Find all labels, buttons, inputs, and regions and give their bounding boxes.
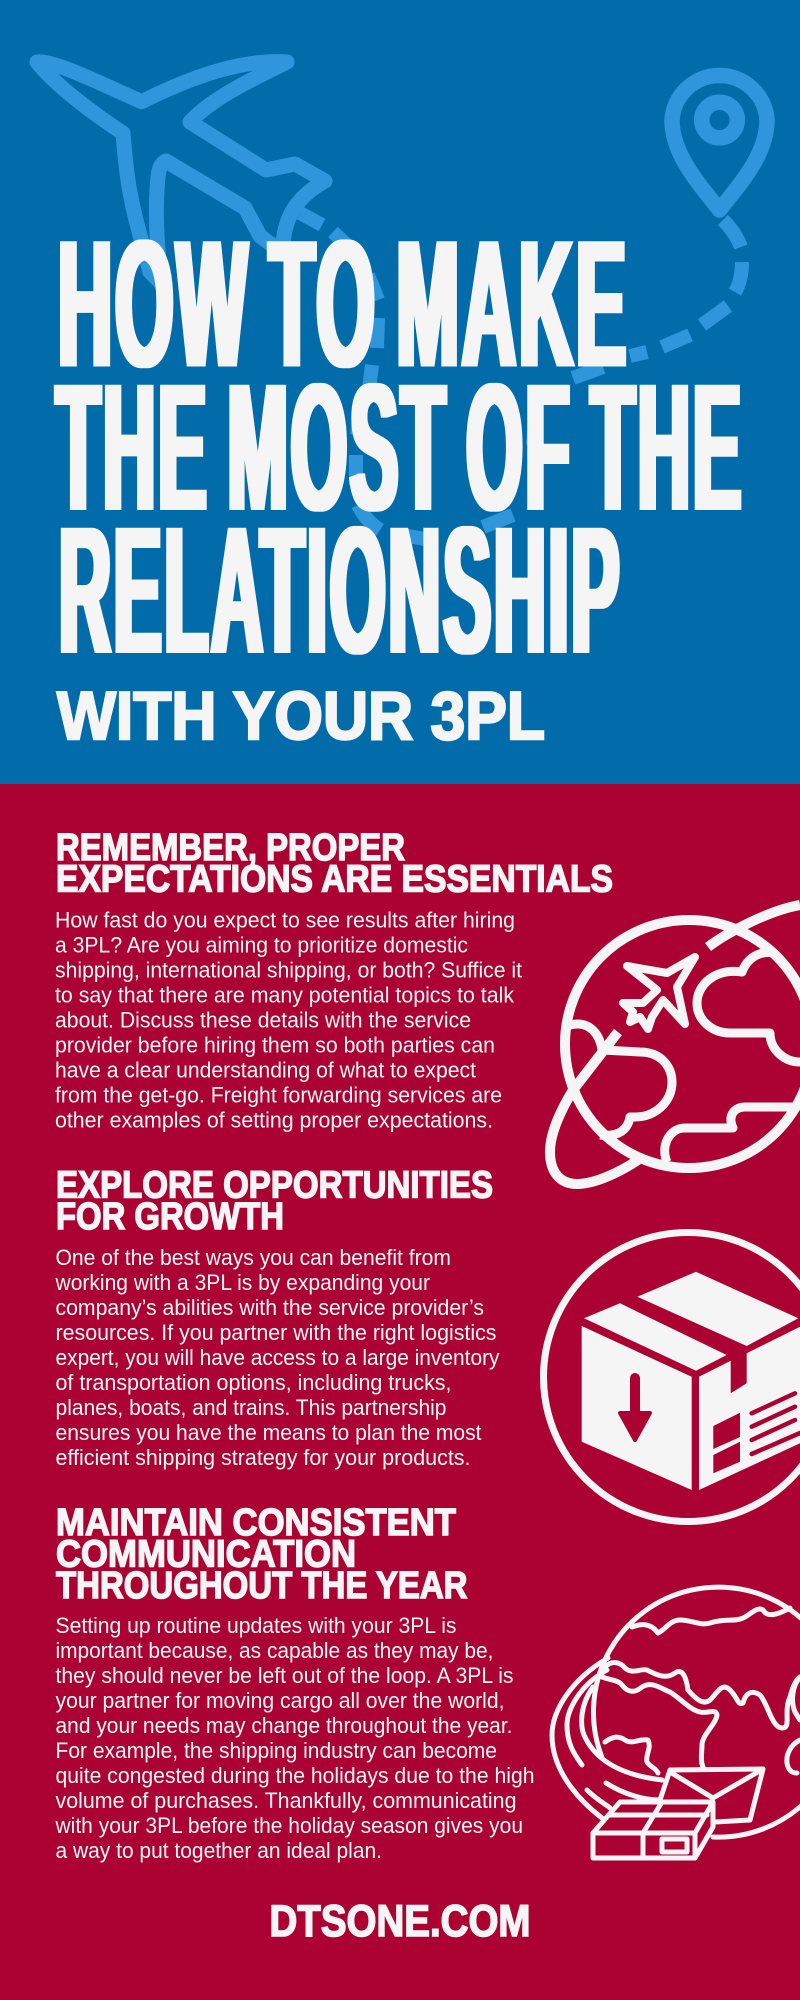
text block: consistent communication: volume of purchases. Thankfully, communicating [56,1788,516,1813]
icon: parcel box in circle [544,1232,800,1522]
text block: opportunities for growth: ensures you have the means to plan the most [56,1420,482,1445]
text block: consistent communication: important because, as capable as they may be, [56,1638,494,1663]
title [56,202,744,692]
text block: opportunities for growth: of transportation options, including trucks, [56,1370,452,1395]
text block: consistent communication: your partner for moving cargo all over the world, [56,1688,504,1713]
text block: opportunities for growth [55,1245,500,1470]
heading: consistent communication: MAINTAIN CONSISTENT [56,1502,456,1544]
text block: proper expectations: other examples of setting proper expectations. [55,1107,493,1132]
text block: proper expectations: about. Discuss these details with the service [55,1007,471,1032]
text block: opportunities for growth: expert, you will have access to a large inventory [56,1345,500,1370]
icon: location pin [672,75,767,210]
section: opportunities for growth [55,1164,500,1470]
section: consistent communication [55,1502,534,1863]
panel: blue header background [0,0,800,784]
section: proper expectations [55,827,613,1132]
text block: consistent communication: a way to put together an ideal plan. [56,1838,382,1863]
text block: proper expectations: from the get-go. Freight forwarding services are [55,1082,502,1107]
heading: consistent communication: THROUGHOUT THE YEAR [56,1565,468,1607]
heading: opportunities for growth [56,1164,493,1238]
text block: opportunities for growth: company’s abilities with the service provider’s [56,1295,484,1320]
icon: airplane outline [37,62,325,285]
text block: proper expectations: provider before hiring them so both parties can [55,1032,495,1057]
heading: consistent communication: COMMUNICATION [56,1534,356,1576]
text block: opportunities for growth: One of the best ways you can benefit from [56,1245,451,1270]
heading: consistent communication [56,1502,468,1607]
text block: opportunities for growth: resources. If you partner with the right logistics [56,1320,497,1345]
text block: proper expectations: to say that there are many potential topics to talk [55,982,514,1007]
icon: globe with plane and orbit [550,905,800,1184]
text block: consistent communication: quite congested during the holidays due to the high [56,1763,534,1788]
text block: consistent communication [55,1613,534,1863]
footer website: DTSONE.COM [270,1897,530,1946]
text block: consistent communication: and your needs may change throughout the year. [56,1713,512,1738]
text block: consistent communication: Setting up routine updates with your 3PL is [56,1613,457,1638]
text block: opportunities for growth: efficient shipping strategy for your products. [56,1445,470,1470]
text block: proper expectations: shipping, international shipping, or both? Suffice it [55,957,522,982]
text block: proper expectations: How fast do you expect to see results after hiring [55,907,515,932]
heading: proper expectations: REMEMBER, PROPER [56,827,405,869]
subtitle: WITH YOUR 3PL [57,678,545,754]
text block: proper expectations: a 3PL? Are you aiming to prioritize domestic [55,932,468,957]
text block: proper expectations: have a clear understanding of what to expect [55,1057,476,1082]
heading: opportunities for growth: EXPLORE OPPORTUNITIES [56,1164,493,1206]
text block: opportunities for growth: planes, boats, and trains. This partnership [56,1395,446,1420]
text block: opportunities for growth: working with a 3PL is by expanding your [55,1270,430,1295]
text block: consistent communication: they should never be left out of the loop. A 3PL is [56,1663,514,1688]
box faces [582,1272,800,1490]
arrow: dashed flight route [300,213,742,540]
panel: red content background [0,784,800,2000]
heading: proper expectations: EXPECTATIONS ARE ESSENTIALS [56,858,613,900]
text block: consistent communication: with your 3PL before the holiday season gives you [55,1813,523,1838]
icon: globe with envelope and package [552,1587,800,1858]
heading: opportunities for growth: FOR GROWTH [56,1196,284,1238]
box markings [620,1378,800,1473]
text block: proper expectations [55,907,522,1132]
text block: consistent communication: For example, the shipping industry can become [56,1738,497,1763]
heading: proper expectations [56,827,613,900]
